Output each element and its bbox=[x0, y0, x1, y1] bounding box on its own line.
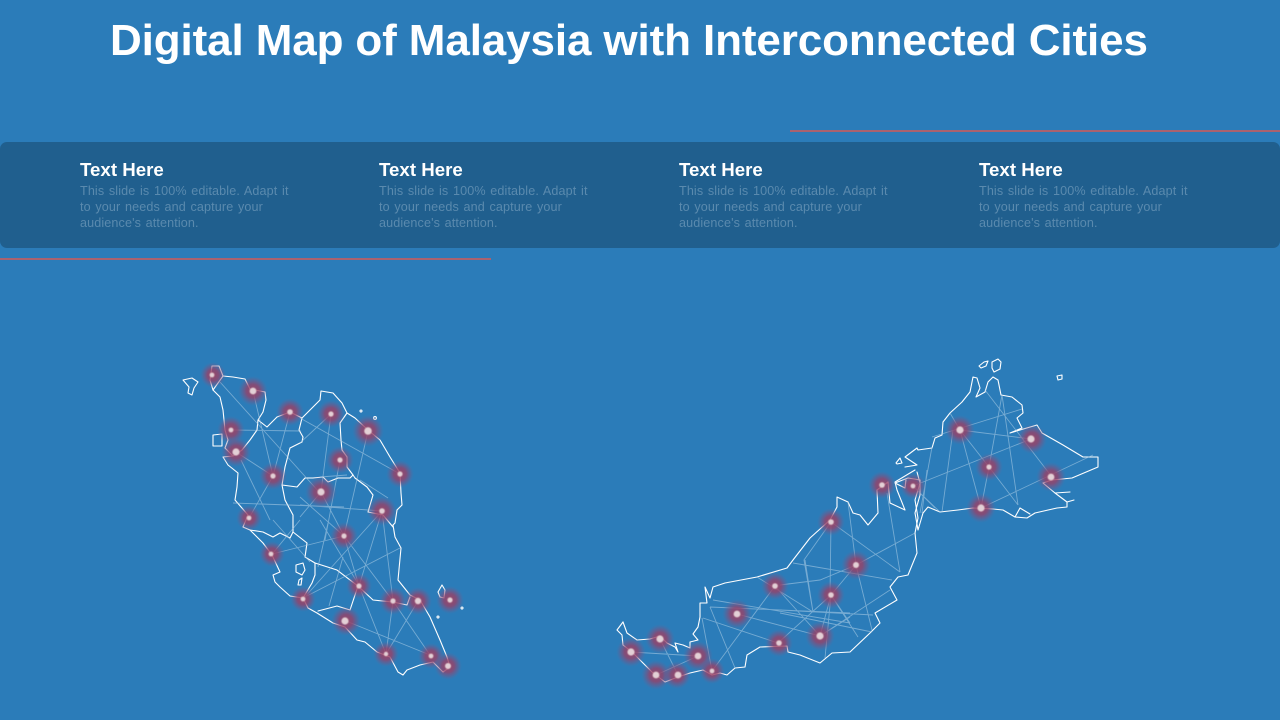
city node bbox=[404, 587, 432, 615]
city markers: peninsula bbox=[200, 362, 464, 680]
text block 3: This slide is 100% editable. Adapt it bbox=[679, 184, 888, 198]
text block 1: to your needs and capture your bbox=[80, 200, 263, 214]
city node bbox=[722, 599, 752, 629]
text block 2: Text Here bbox=[379, 159, 463, 180]
text block 4: This slide is 100% editable. Adapt it bbox=[979, 184, 1188, 198]
city node bbox=[346, 573, 372, 599]
city node bbox=[761, 572, 789, 600]
city node bbox=[645, 624, 675, 654]
text block 4 bbox=[979, 159, 1188, 230]
city node bbox=[331, 606, 361, 636]
city node bbox=[841, 550, 871, 580]
city node bbox=[966, 493, 996, 523]
text block 1 bbox=[80, 159, 289, 230]
text block 1: Text Here bbox=[80, 159, 164, 180]
city node bbox=[945, 415, 975, 445]
city node bbox=[699, 658, 725, 684]
city node bbox=[330, 522, 358, 550]
city node bbox=[236, 505, 262, 531]
city node bbox=[765, 629, 793, 657]
bottom accent line bbox=[0, 258, 491, 260]
network lines: borneo bbox=[631, 390, 1093, 675]
text block 2: to your needs and capture your bbox=[379, 200, 562, 214]
text block 3: audience's attention. bbox=[679, 216, 798, 230]
text block 2: audience's attention. bbox=[379, 216, 498, 230]
city node bbox=[238, 376, 268, 406]
city node bbox=[290, 586, 316, 612]
city node bbox=[1017, 424, 1047, 454]
city node bbox=[418, 643, 444, 669]
text block 1: audience's attention. bbox=[80, 216, 199, 230]
city node bbox=[868, 471, 896, 499]
city node bbox=[259, 541, 285, 567]
city node bbox=[276, 398, 304, 426]
city node bbox=[200, 362, 226, 388]
city node bbox=[805, 621, 835, 651]
city node bbox=[373, 641, 399, 667]
city node bbox=[975, 453, 1003, 481]
panel: text band bbox=[0, 142, 1280, 248]
city node bbox=[217, 416, 245, 444]
city node bbox=[434, 652, 462, 680]
city node bbox=[817, 508, 845, 536]
city node bbox=[641, 660, 671, 690]
city node bbox=[386, 460, 414, 488]
network lines: peninsula bbox=[220, 382, 430, 655]
city node bbox=[1036, 462, 1066, 492]
borneo outline: Sarawak and Sabah bbox=[617, 359, 1098, 682]
title: Digital Map of Malaysia with Interconnected Cities bbox=[110, 16, 1148, 65]
text block 2: This slide is 100% editable. Adapt it bbox=[379, 184, 588, 198]
text block 4: to your needs and capture your bbox=[979, 200, 1162, 214]
city node bbox=[367, 496, 397, 526]
city node bbox=[221, 437, 251, 467]
city node bbox=[317, 400, 345, 428]
text block 3: to your needs and capture your bbox=[679, 200, 862, 214]
text block 4: audience's attention. bbox=[979, 216, 1098, 230]
peninsular outline with state borders bbox=[183, 366, 463, 675]
city node bbox=[305, 476, 337, 508]
city markers: borneo bbox=[616, 415, 1066, 690]
city node bbox=[436, 586, 464, 614]
city node bbox=[817, 581, 845, 609]
text block 3: Text Here bbox=[679, 159, 763, 180]
city node bbox=[379, 587, 407, 615]
text block 2 bbox=[379, 159, 588, 230]
city node bbox=[683, 641, 713, 671]
city node bbox=[663, 661, 691, 689]
text block 1: This slide is 100% editable. Adapt it bbox=[80, 184, 289, 198]
city node bbox=[259, 462, 287, 490]
city node bbox=[352, 415, 384, 447]
city node bbox=[616, 637, 646, 667]
city node bbox=[900, 473, 926, 499]
top accent line bbox=[790, 130, 1280, 132]
city node bbox=[326, 446, 354, 474]
text block 3 bbox=[679, 159, 888, 230]
text block 4: Text Here bbox=[979, 159, 1063, 180]
